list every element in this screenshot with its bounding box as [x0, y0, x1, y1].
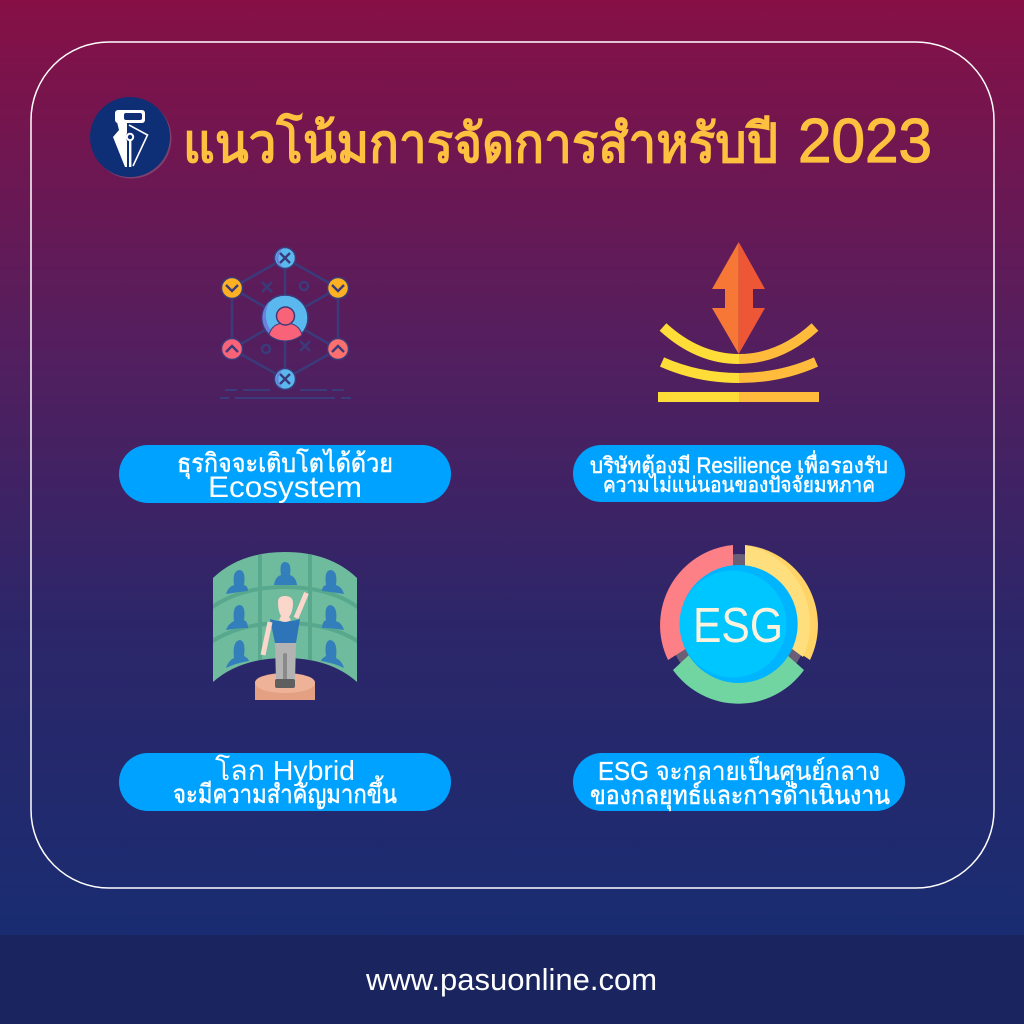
rounded white frame: [31, 42, 994, 888]
pill: hybrid caption: [119, 753, 451, 811]
footer band: [0, 935, 1024, 1024]
icon: ESG ring: [660, 545, 818, 704]
icon: pen nib logo: [90, 97, 172, 178]
icon: resilience arrow and curves: [658, 242, 819, 402]
pill: ecosystem caption: [119, 445, 451, 504]
pill: resilience caption: บริษัทต้องมี Resilience เพื่อรองรับ: [590, 450, 888, 478]
icon: hybrid world video wall: [211, 550, 359, 700]
icon: ESG ring: ESG: [693, 599, 783, 653]
pill: hybrid caption: โลก Hybrid: [215, 754, 355, 786]
pill: ESG caption: [573, 753, 905, 811]
pill: resilience caption: [573, 445, 905, 502]
title: แนวโน้มการจัดการสำหรับปี: [183, 112, 778, 174]
pill: ecosystem caption: Ecosystem: [208, 471, 362, 504]
pill: ecosystem caption: ธุรกิจจะเติบโตได้ด้วย: [177, 448, 393, 479]
pill: resilience caption: ความไม่แน่นอนของปัจจัยมหภาค: [603, 473, 875, 497]
footer website text: www.pasuonline.com: [365, 962, 657, 997]
pill: hybrid caption: จะมีความสำคัญมากขึ้น: [173, 775, 397, 809]
title year: 2023: [798, 107, 932, 176]
pill: ESG caption: ของกลยุทธ์และการดำเนินงาน: [590, 780, 890, 811]
pill: ESG caption: ESG จะกลายเป็นศูนย์กลาง: [598, 755, 880, 787]
icon: ecosystem network: [220, 248, 351, 398]
